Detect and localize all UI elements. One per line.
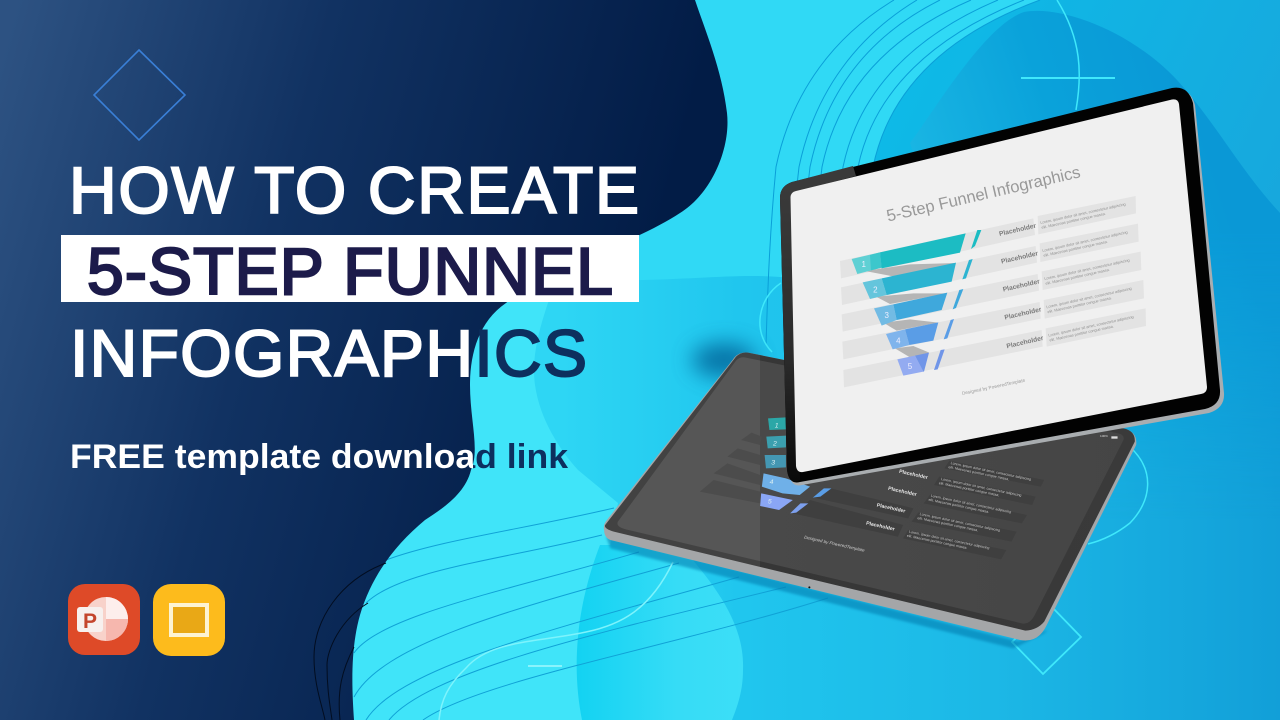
decorative light-cyan accents (439, 0, 1148, 720)
funnel step 2 (863, 259, 973, 304)
reflected body text: elit. Maecenas porttitor congue massa. (928, 498, 989, 514)
reflected row bands (700, 433, 1044, 559)
reflected body text: elit. Maecenas porttitor congue massa. (917, 516, 978, 532)
funnel step 1 (852, 230, 981, 278)
icon: diamond outline (94, 50, 185, 140)
body text: Lorem, ipsum dolor sit amet, consectetur adipiscing (1042, 230, 1128, 253)
subheading: FREE template download link (70, 438, 568, 476)
reflected body text: elit. Maecenas porttitor congue massa. (906, 534, 968, 550)
reflected funnel steps: 5 (768, 499, 772, 506)
reflected body text: Lorem, ipsum dolor sit amet, consectetur adipiscing (941, 477, 1022, 497)
reflected funnel steps: 2 (772, 441, 777, 448)
funnel step 4 (886, 319, 954, 357)
reflected body text: Lorem, ipsum dolor sit amet, consectetur adipiscing (919, 512, 1001, 532)
reflected funnel steps: 3 (771, 460, 775, 467)
icon: PowerPoint: P (83, 610, 97, 633)
heading line 3: INFOGRAPHICS (70, 316, 587, 390)
upper tablet (780, 88, 1224, 486)
body text: Lorem, ipsum dolor sit amet, consectetur adipiscing (1048, 315, 1134, 338)
lower tablet bezel (605, 352, 1135, 631)
reflected body text: elit. Maecenas porttitor congue massa. (938, 481, 1000, 497)
funnel step 3 (874, 289, 963, 331)
funnel step 5: 5 (908, 362, 913, 371)
placeholder labels: Placeholder (1002, 278, 1041, 294)
decorative wavy lines, bottom (354, 508, 828, 720)
body text: Lorem, ipsum dolor sit amet, consectetur adipiscing (1044, 258, 1130, 281)
funnel step 3: 3 (884, 311, 889, 320)
body text: elit. Maecenas porttitor congue massa. (1047, 296, 1112, 314)
placeholder labels: Placeholder (1001, 250, 1039, 266)
placeholder labels (999, 223, 1045, 350)
icon: PowerPoint (68, 584, 140, 655)
reflected body text: Lorem, ipsum dolor sit amet, consectetur adipiscing (930, 494, 1012, 514)
body text: Lorem, ipsum dolor sit amet, consectetur adipiscing (1040, 202, 1126, 225)
slide content (840, 162, 1146, 396)
placeholder labels: Placeholder (1004, 306, 1043, 322)
body text: elit. Maecenas porttitor congue massa. (1045, 268, 1110, 286)
reflected body text: Lorem, ipsum dolor sit amet, consectetur adipiscing (909, 530, 990, 550)
body text: elit. Maecenas porttitor congue massa. (1041, 212, 1106, 230)
reflected body text: elit. Maecenas porttitor congue massa. (948, 465, 1009, 481)
funnel step 4: 4 (896, 336, 901, 345)
funnel step 1: 1 (861, 260, 866, 269)
reflected placeholder labels (865, 469, 928, 533)
icon: Google Slides (153, 584, 225, 656)
navy blob panel (0, 0, 727, 720)
upper tablet silver edge (782, 90, 1224, 485)
reflected funnel steps: 1 (775, 422, 779, 429)
body text (1040, 202, 1135, 343)
reflected placeholder labels: Placeholder (876, 502, 906, 515)
reflected placeholder labels: Placeholder (865, 520, 895, 533)
lower tablet silver body (604, 353, 1136, 641)
footer credit: Designed by PoweredTemplate (961, 378, 1026, 396)
background: cyan to blue gradient (352, 0, 1280, 720)
slide title: 5-Step Funnel Infographics (885, 162, 1082, 226)
decorative dark lines on navy (314, 563, 386, 720)
body text: Lorem, ipsum dolor sit amet, consectetur adipiscing (1046, 287, 1132, 309)
camera dot (808, 586, 810, 588)
funnel step 5 (897, 349, 945, 376)
placeholder labels: Placeholder (999, 223, 1037, 238)
reflected placeholder labels: Placeholder (887, 486, 917, 498)
reflected funnel steps: 4 (770, 479, 774, 486)
funnel step 2: 2 (873, 285, 878, 294)
lower tablet, dark reflected screen (604, 352, 1136, 648)
reflected body text: Lorem, ipsum dolor sit amet, consectetur adipiscing (950, 461, 1032, 481)
heading line 2 with white highlight: 5-STEP FUNNEL (87, 234, 613, 308)
placeholder labels: Placeholder (1006, 335, 1045, 350)
reflected footer credit: Designed by PoweredTemplate (804, 534, 866, 553)
row bands and text boxes (840, 196, 1146, 387)
tablet shadow (692, 343, 756, 377)
reflected status bar (1100, 434, 1118, 439)
reflected placeholder labels: Placeholder (898, 469, 928, 481)
reflected funnel steps (760, 417, 831, 513)
upper tablet bezel (780, 88, 1220, 483)
body text: elit. Maecenas porttitor congue massa. (1049, 324, 1114, 343)
reflected body text (906, 461, 1032, 554)
reflected status bar: 100% (1100, 434, 1108, 438)
upper tablet screen (790, 99, 1207, 472)
decorative concentric lines, top (766, 0, 1040, 345)
body text: elit. Maecenas porttitor congue massa. (1043, 240, 1108, 258)
lower tablet screen (617, 357, 1124, 624)
heading line 1: HOW TO CREATE (69, 153, 639, 227)
